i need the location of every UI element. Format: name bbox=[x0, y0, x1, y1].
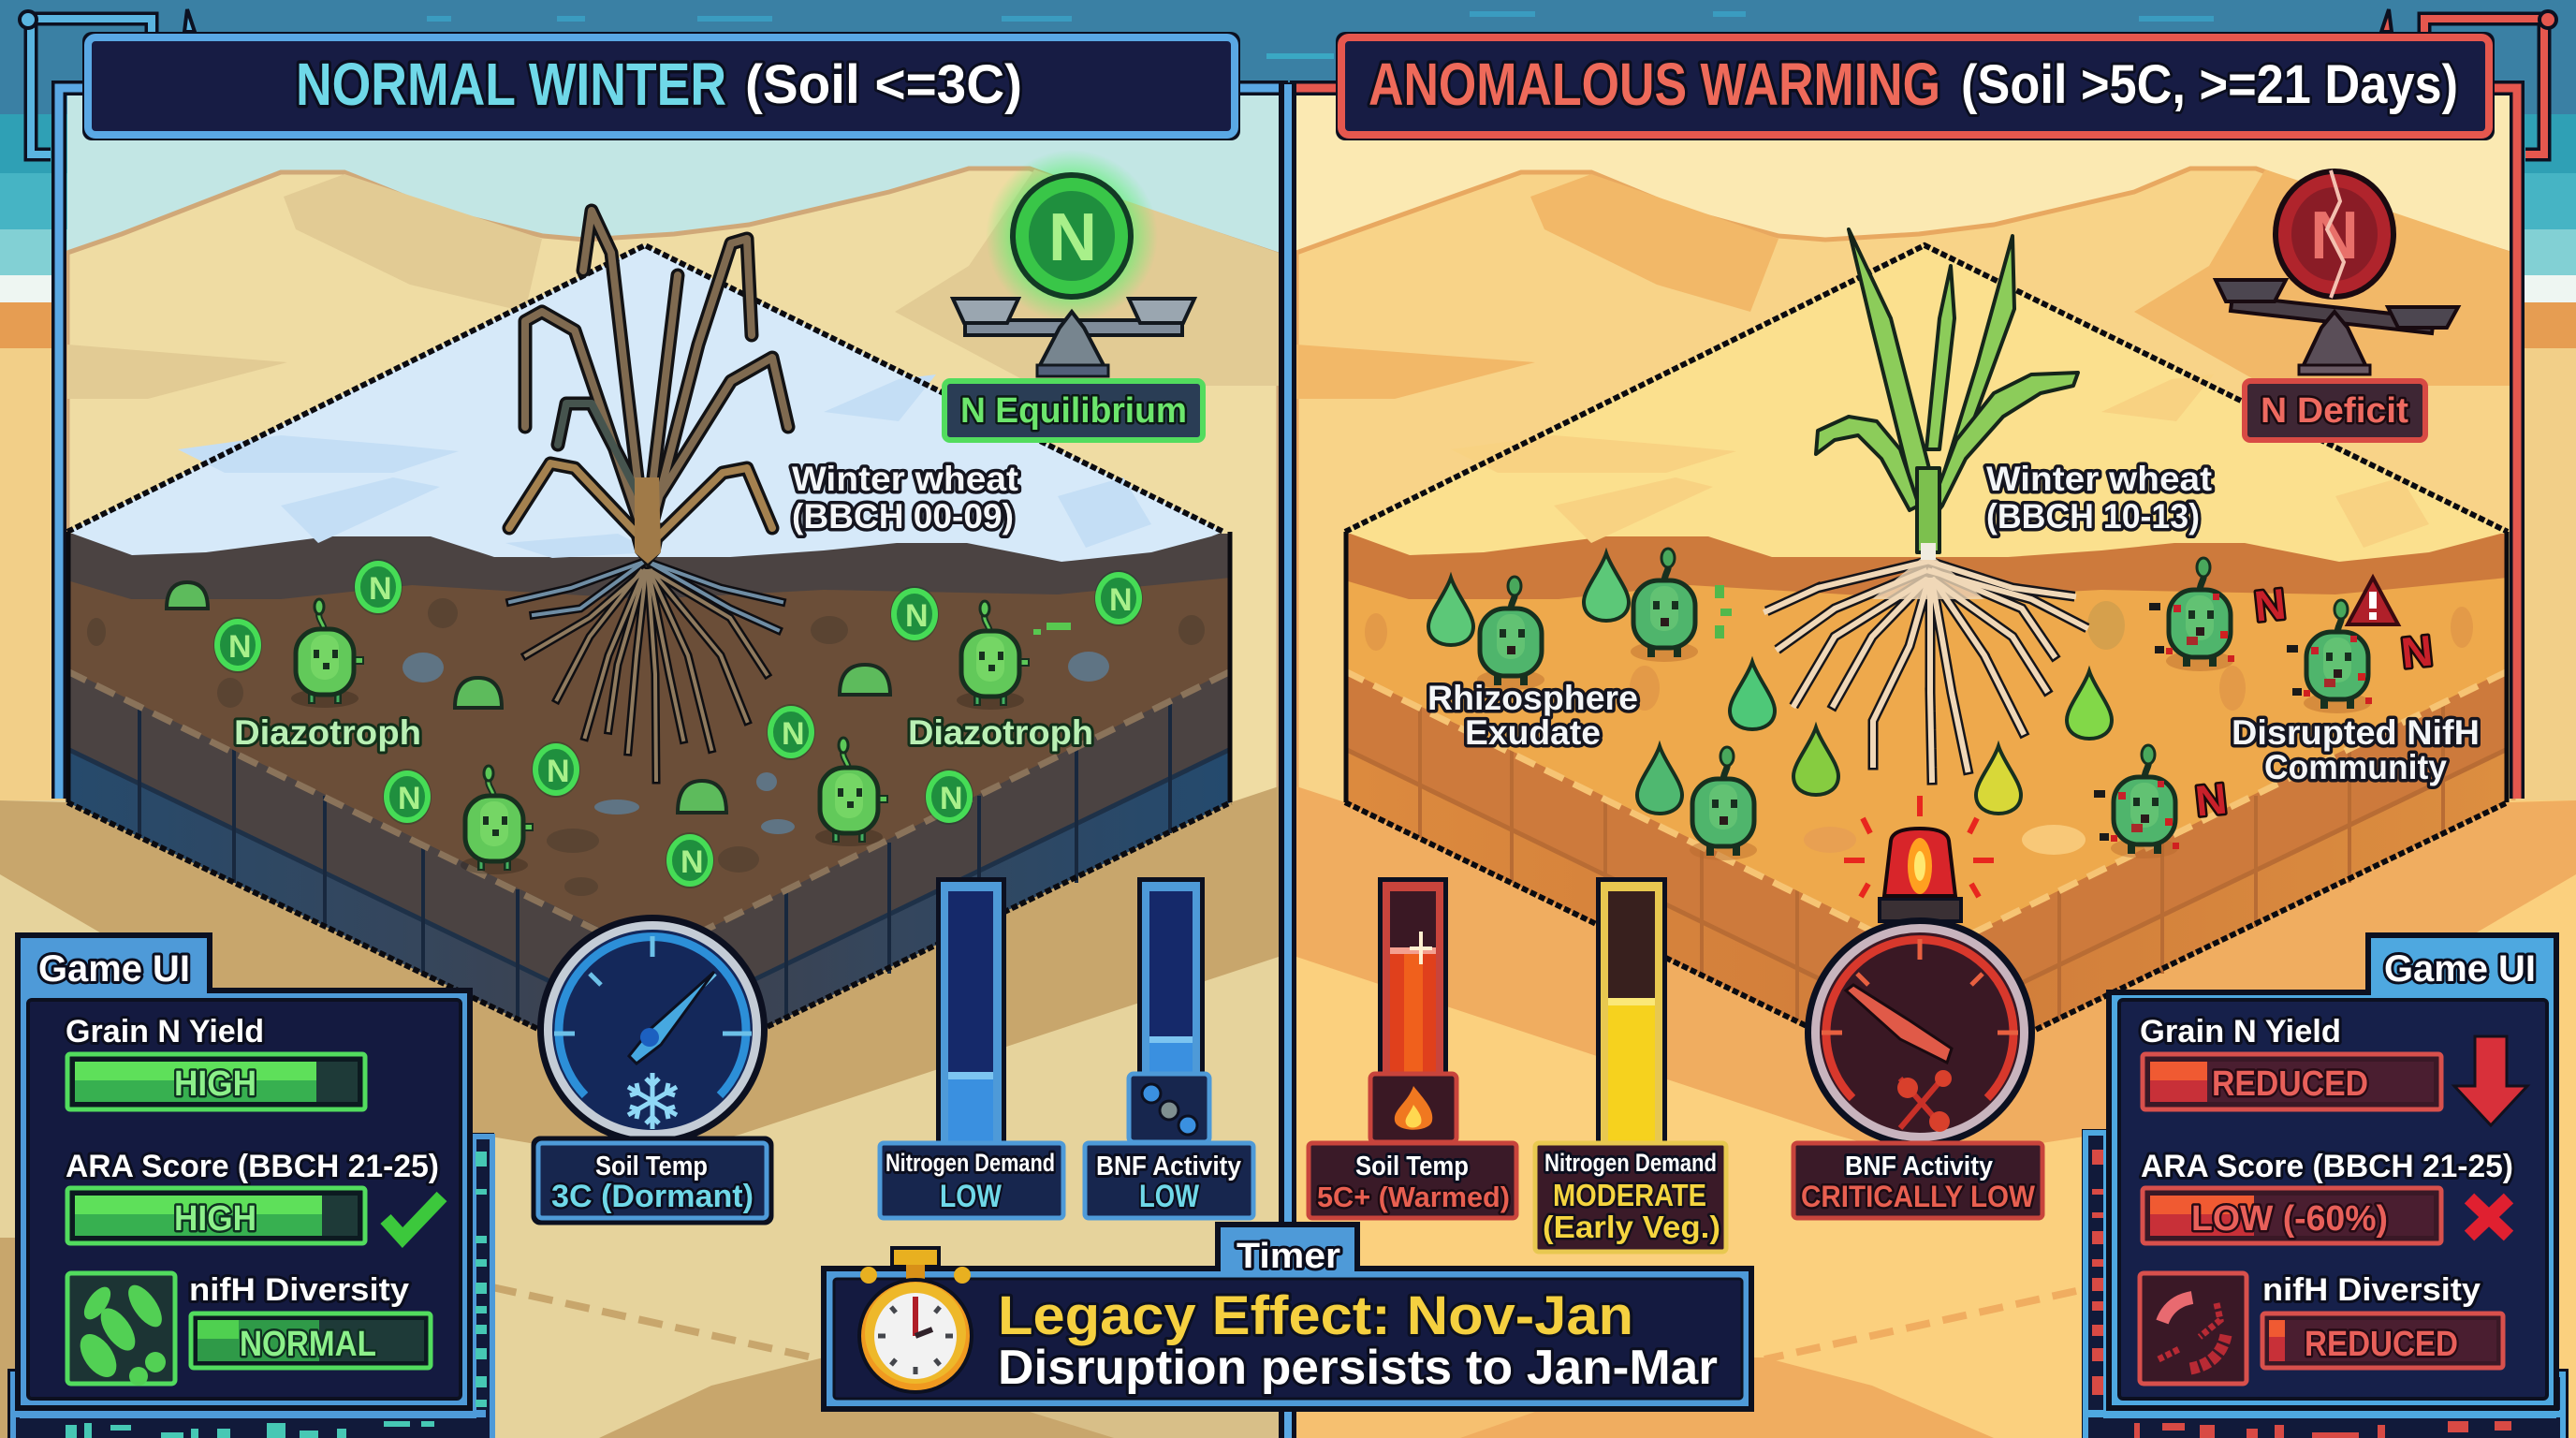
bar: grain N yield reduced bbox=[2143, 1054, 2441, 1109]
label: winter wheat right: (BBCH 10-13) bbox=[1986, 497, 2200, 536]
bar: ARA score low bbox=[2143, 1188, 2441, 1243]
text: nifH diversity: nifH Diversity bbox=[189, 1272, 409, 1308]
diazotroph microbes: normal winter bbox=[291, 599, 1071, 874]
disrupted microbes and broken nitrogen: N bbox=[2193, 774, 2229, 826]
label: rhizosphere exudate: Exudate bbox=[1465, 713, 1601, 752]
icon: check mark bbox=[386, 1196, 442, 1238]
icon: N deficit broken balance bbox=[2216, 169, 2458, 374]
icon: red cross bbox=[2469, 1198, 2509, 1236]
label: BNF activity critically low: BNF Activity bbox=[1845, 1152, 1993, 1181]
title: normal winter bbox=[82, 32, 1240, 140]
badge: N deficit: N Deficit bbox=[2261, 391, 2408, 431]
label: soil temp normal: Soil Temp bbox=[595, 1152, 708, 1181]
tab label: game UI right: Game UI bbox=[2384, 948, 2536, 990]
roots: active winter wheat bbox=[1766, 552, 2086, 780]
label: nitrogen demand moderate bbox=[1535, 1143, 1726, 1252]
label: soil temp normal: 3C (Dormant) bbox=[551, 1179, 754, 1214]
nitrogen coins: normal winter soil: N bbox=[940, 781, 963, 816]
label: nitrogen demand moderate: Nitrogen Demand bbox=[1544, 1149, 1717, 1177]
roots: dormant winter wheat bbox=[510, 562, 782, 780]
bar: nifH diversity normal bbox=[191, 1313, 431, 1368]
bar: ARA score low: LOW (-60%) bbox=[2191, 1199, 2388, 1239]
back frame: left tech strip bbox=[7, 1133, 494, 1438]
label: BNF activity low: LOW bbox=[1139, 1179, 1200, 1214]
label: nitrogen demand moderate: MODERATE bbox=[1553, 1178, 1706, 1212]
labels: diazotroph bbox=[234, 713, 1093, 752]
title: anomalous warming: (Soil >5C, >=21 Days) bbox=[1961, 54, 2458, 115]
bar: nifH diversity normal: NORMAL bbox=[240, 1325, 376, 1364]
text: ARA score: ARA Score (BBCH 21-25) bbox=[66, 1149, 439, 1184]
nitrogen coins: normal winter soil: N bbox=[782, 716, 805, 752]
icon: down arrow bbox=[2454, 1036, 2527, 1125]
label: winter wheat left bbox=[792, 460, 1018, 536]
soil block: anomalous warming bbox=[1345, 245, 2508, 1083]
label: winter wheat right: Winter wheat bbox=[1986, 460, 2212, 498]
label: soil temp warmed bbox=[1309, 1143, 1516, 1218]
label: disrupted nifH community: Disrupted NifH bbox=[2232, 713, 2480, 752]
bar: ARA score high bbox=[67, 1188, 365, 1243]
badge: N equilibrium bbox=[944, 381, 1203, 440]
nitrogen coins: normal winter soil bbox=[213, 559, 1143, 888]
bar: BNF activity low bbox=[1129, 877, 1209, 1142]
label: soil temp normal bbox=[535, 1140, 769, 1221]
alarm light bbox=[1844, 796, 1994, 921]
title: anomalous warming: ANOMALOUS WARMING bbox=[1368, 51, 1940, 118]
text: legacy effect: Legacy Effect: Nov-Jan bbox=[998, 1285, 1633, 1346]
label: disrupted nifH community: Community bbox=[2264, 748, 2447, 786]
bar: grain N yield reduced: REDUCED bbox=[2212, 1064, 2368, 1104]
nitrogen coins: normal winter soil: N bbox=[681, 844, 704, 880]
text: ARA score right: ARA Score (BBCH 21-25) bbox=[2141, 1149, 2513, 1184]
label: BNF activity critically low: CRITICALLY LOW bbox=[1801, 1180, 2036, 1213]
panel: game UI normal bbox=[18, 935, 470, 1408]
bar: soil temp warmed bbox=[1370, 877, 1456, 1142]
nitrogen coins: normal winter soil: N bbox=[1109, 582, 1133, 618]
text: grain N yield right: Grain N Yield bbox=[2140, 1014, 2341, 1049]
disrupted microbes and broken nitrogen bbox=[2094, 558, 2435, 858]
bar: grain N yield high: HIGH bbox=[174, 1064, 256, 1104]
bar: nifH diversity reduced bbox=[2262, 1313, 2503, 1368]
icon: damaged nifH microbes bbox=[2140, 1273, 2247, 1384]
bar: nifH diversity reduced: REDUCED bbox=[2305, 1325, 2458, 1364]
bar: nitrogen demand moderate bbox=[1596, 877, 1667, 1144]
nitrogen coins: normal winter soil: N bbox=[547, 754, 570, 789]
gauge: soil temp normal bbox=[537, 915, 768, 1145]
icon: N equilibrium balance: N bbox=[1048, 200, 1097, 275]
badge: N deficit bbox=[2245, 381, 2425, 440]
label: winter wheat left: Winter wheat bbox=[792, 460, 1018, 498]
label: nitrogen demand moderate: (Early Veg.) bbox=[1543, 1210, 1720, 1244]
title: anomalous warming bbox=[1336, 32, 2495, 140]
label: rhizosphere exudate bbox=[1427, 679, 1638, 752]
text: nifH diversity right: nifH Diversity bbox=[2262, 1272, 2481, 1308]
label: nitrogen demand low bbox=[880, 1143, 1063, 1218]
title: normal winter: (Soil <=3C) bbox=[745, 54, 1022, 115]
label: BNF activity low: BNF Activity bbox=[1096, 1152, 1241, 1181]
frame: right red border and pipe bbox=[1290, 9, 2556, 799]
tab label: game UI left: Game UI bbox=[38, 948, 190, 990]
label: BNF activity low bbox=[1085, 1143, 1253, 1218]
plant: dormant winter wheat bbox=[509, 211, 788, 565]
label: winter wheat right bbox=[1986, 460, 2212, 536]
labels: diazotroph: Diazotroph bbox=[908, 713, 1093, 752]
panel background: anomalous warming bbox=[1296, 94, 2576, 1438]
nitrogen coins: normal winter soil: N bbox=[905, 598, 929, 634]
panel: game UI warming bbox=[2109, 935, 2556, 1408]
icon: stopwatch bbox=[857, 1248, 973, 1394]
nitrogen coins: normal winter soil: N bbox=[369, 571, 392, 607]
nitrogen coins: normal winter soil: N bbox=[398, 781, 421, 816]
nitrogen coins: normal winter soil: N bbox=[228, 629, 252, 665]
exudate droplets bbox=[1428, 553, 2112, 814]
badge: N equilibrium: N Equilibrium bbox=[960, 391, 1187, 431]
panel background: normal winter bbox=[0, 94, 1279, 1438]
healthy rhizosphere microbes bbox=[1477, 549, 1757, 860]
divider: central bar bbox=[1279, 82, 1296, 1438]
label: rhizosphere exudate: Rhizosphere bbox=[1427, 679, 1638, 717]
title: normal winter: NORMAL WINTER bbox=[296, 51, 726, 118]
soil block: normal winter bbox=[67, 245, 1231, 1083]
label: soil temp warmed: 5C+ (Warmed) bbox=[1317, 1181, 1510, 1213]
label: nitrogen demand low: Nitrogen Demand bbox=[886, 1149, 1055, 1177]
icon: healthy nifH microbes bbox=[67, 1273, 175, 1386]
tab label: timer: Timer bbox=[1237, 1237, 1340, 1276]
text: grain N yield: Grain N Yield bbox=[66, 1014, 264, 1049]
icon: N deficit broken balance: N bbox=[2310, 198, 2359, 273]
icon: N equilibrium balance bbox=[953, 150, 1194, 376]
disrupted microbes and broken nitrogen: N bbox=[2399, 625, 2435, 678]
label: soil temp warmed: Soil Temp bbox=[1355, 1152, 1469, 1181]
bar: ARA score high: HIGH bbox=[174, 1199, 256, 1239]
label: BNF activity critically low bbox=[1793, 1143, 2042, 1218]
labels: diazotroph: Diazotroph bbox=[234, 713, 421, 752]
text: disruption persists: Disruption persists to Jan-Mar bbox=[998, 1341, 1718, 1395]
plant: green winter wheat bbox=[1816, 229, 2078, 560]
panel: timer bbox=[824, 1225, 1751, 1409]
gauge: BNF activity critically low bbox=[1805, 917, 2035, 1148]
label: nitrogen demand low: LOW bbox=[940, 1179, 1003, 1214]
disrupted microbes and broken nitrogen: N bbox=[2252, 580, 2288, 631]
label: winter wheat left: (BBCH 00-09) bbox=[792, 497, 1014, 536]
back frame: right tech strip bbox=[2082, 1129, 2569, 1438]
bar: nitrogen demand low bbox=[936, 877, 1006, 1144]
label: disrupted nifH community bbox=[2232, 713, 2480, 786]
bar: grain N yield high bbox=[67, 1054, 365, 1109]
frame: left blue border and pipe bbox=[20, 9, 1288, 799]
